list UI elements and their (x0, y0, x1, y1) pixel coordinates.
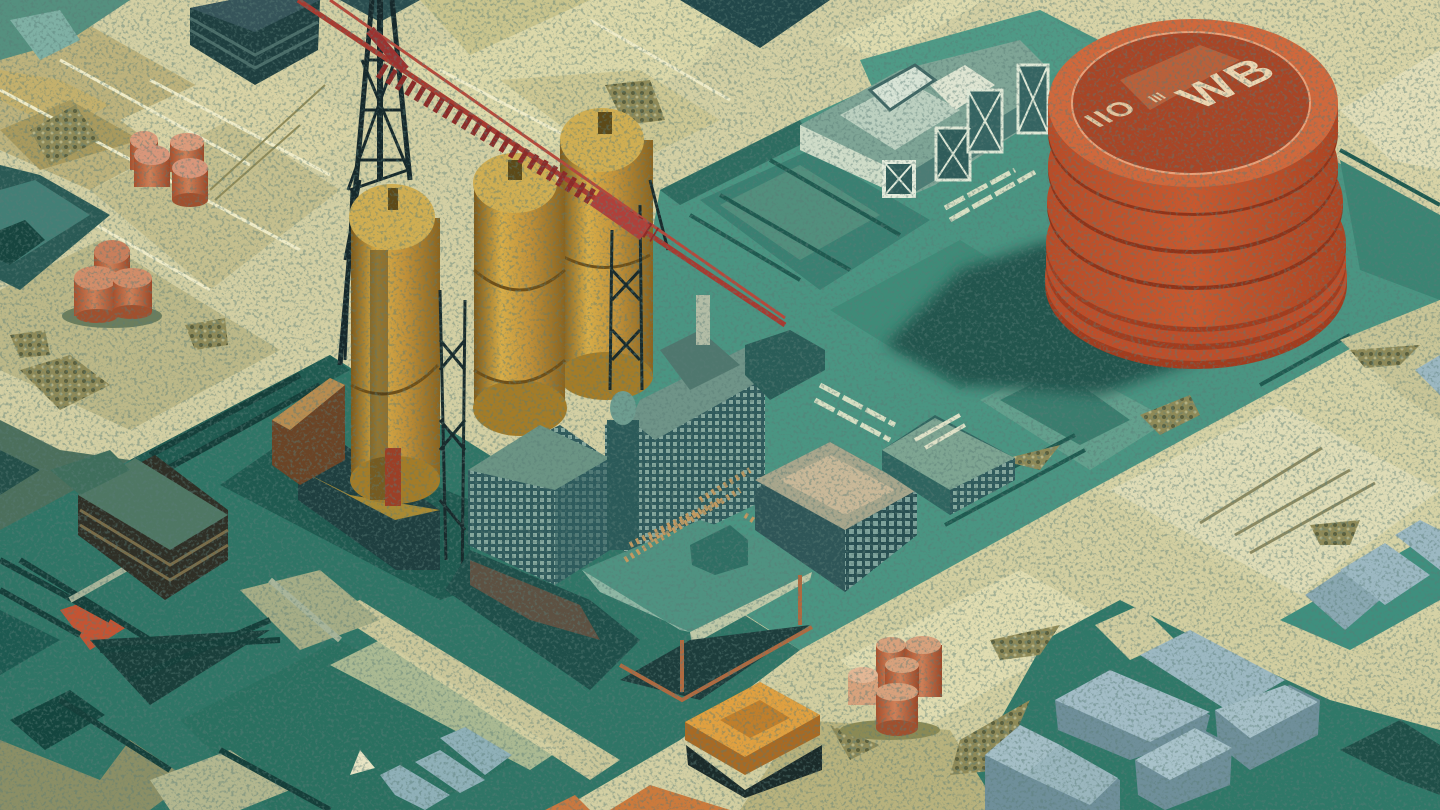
icon: wrapped bales lower right (985, 630, 1320, 810)
building: modular plant top centre (800, 40, 1050, 198)
ground: top-left olive fields (0, 0, 760, 430)
building: dark block top-left (190, 0, 830, 85)
ground: central teal plaza (600, 10, 1440, 650)
building: tall glass tower (605, 295, 825, 560)
building: canopy platform (582, 470, 812, 700)
ground: lower left dark teal yard (0, 355, 800, 810)
icon: scaffold towers (440, 180, 668, 590)
building: base plinth under silos (220, 378, 470, 600)
building: flat warehouse (755, 442, 917, 592)
building: small warehouse right (882, 415, 1015, 515)
icon: crane boom (298, 0, 785, 325)
building: lower base (445, 550, 640, 690)
coin emblem text: WB (1165, 50, 1291, 116)
icon: bale blocks lower left (380, 727, 512, 810)
ground: top-right cream tiles (830, 0, 1440, 210)
icon: orange roof right (610, 785, 730, 810)
icon: orange coin stack (1045, 19, 1347, 369)
ground: lower right tiles and teal yards (680, 490, 1440, 810)
building: front glass tower (468, 391, 639, 585)
icon: silo one (349, 184, 440, 506)
building: dark yard left (0, 165, 110, 290)
coin top face: III (1145, 91, 1170, 105)
shadow: coin stack shadow (885, 240, 1200, 395)
icon: wrapped bales right (1305, 355, 1440, 630)
coin top face: IIO (1078, 96, 1146, 132)
coin top face (1048, 19, 1338, 187)
icon: copper barrels lower centre (840, 636, 942, 740)
building: stepped block left (50, 450, 228, 600)
icon: copper barrels left (62, 240, 162, 328)
icon: orange roof left (545, 795, 590, 810)
icon: crane mast (340, 0, 410, 365)
ground: right cream field (1090, 300, 1440, 660)
icon: silo three (559, 108, 653, 400)
icon: silo two (473, 153, 567, 436)
icon: copper barrels top-left (130, 131, 208, 207)
icon: orange box stack (685, 682, 822, 798)
